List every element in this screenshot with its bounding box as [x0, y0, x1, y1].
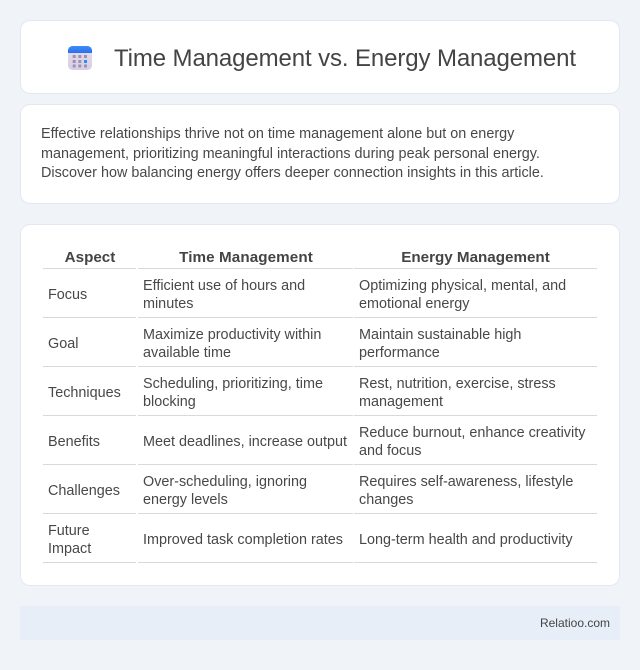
row: Goal [48, 327, 521, 361]
header: Aspect: Aspect [65, 249, 115, 266]
panel: comparison table [20, 224, 620, 586]
row: Benefits: and focus [359, 443, 421, 459]
intro text: management, prioritizing meaningful interactions during peak personal energy. [41, 146, 540, 162]
row: Techniques: Scheduling, prioritizing, time [143, 376, 323, 392]
row: Future Impact: Future [48, 523, 90, 539]
row: Techniques: Techniques [48, 385, 121, 401]
row: Focus: Optimizing physical, mental, and [359, 278, 566, 294]
header: Energy Management: Energy Management [401, 249, 550, 266]
row: Focus: minutes [143, 296, 193, 312]
row: Future Impact: Impact [48, 541, 91, 557]
table header row [65, 249, 550, 266]
row: Goal: performance [359, 345, 440, 361]
row: Future Impact: Improved task completion rates [143, 532, 343, 548]
row: Challenges: energy levels [143, 492, 228, 508]
row: Techniques: blocking [143, 394, 196, 410]
row: Challenges [48, 474, 573, 508]
intro text: Effective relationships thrive not on time management alone but on energy [41, 126, 514, 142]
row: Focus: Focus [48, 287, 87, 303]
row: Challenges: Challenges [48, 483, 120, 499]
row: Benefits: Meet deadlines, increase output [143, 434, 347, 450]
row: Techniques [48, 376, 556, 410]
row: Future Impact: Long-term health and productivity [359, 532, 573, 548]
icon: calendar [68, 46, 92, 70]
row: Challenges: Over-scheduling, ignoring [143, 474, 307, 490]
row: Techniques: management [359, 394, 443, 410]
row: Future Impact [48, 523, 573, 557]
footer bar [20, 606, 620, 640]
panel: title card [20, 20, 620, 94]
row: Goal: Maintain sustainable high [359, 327, 521, 343]
intro text [41, 126, 544, 181]
panel: introduction [20, 104, 620, 204]
row: Benefits: Reduce burnout, enhance creativity [359, 425, 585, 441]
row: Techniques: Rest, nutrition, exercise, stress [359, 376, 556, 392]
row: Focus: Efficient use of hours and [143, 278, 305, 294]
row: Goal: Goal [48, 336, 78, 352]
title: Time Management vs. Energy Management [114, 45, 576, 72]
footer brand: Relatioo.com [540, 616, 610, 630]
row: Goal: available time [143, 345, 231, 361]
header: Time Management: Time Management [179, 249, 313, 266]
row: Benefits [48, 425, 586, 459]
row: Goal: Maximize productivity within [143, 327, 321, 343]
row: Focus: emotional energy [359, 296, 469, 312]
row: Challenges: changes [359, 492, 413, 508]
row: Focus [48, 278, 566, 312]
intro text: Discover how balancing energy offers deeper connection insights in this article. [41, 165, 544, 181]
row: Challenges: Requires self-awareness, lifestyle [359, 474, 573, 490]
row: Benefits: Benefits [48, 434, 100, 450]
